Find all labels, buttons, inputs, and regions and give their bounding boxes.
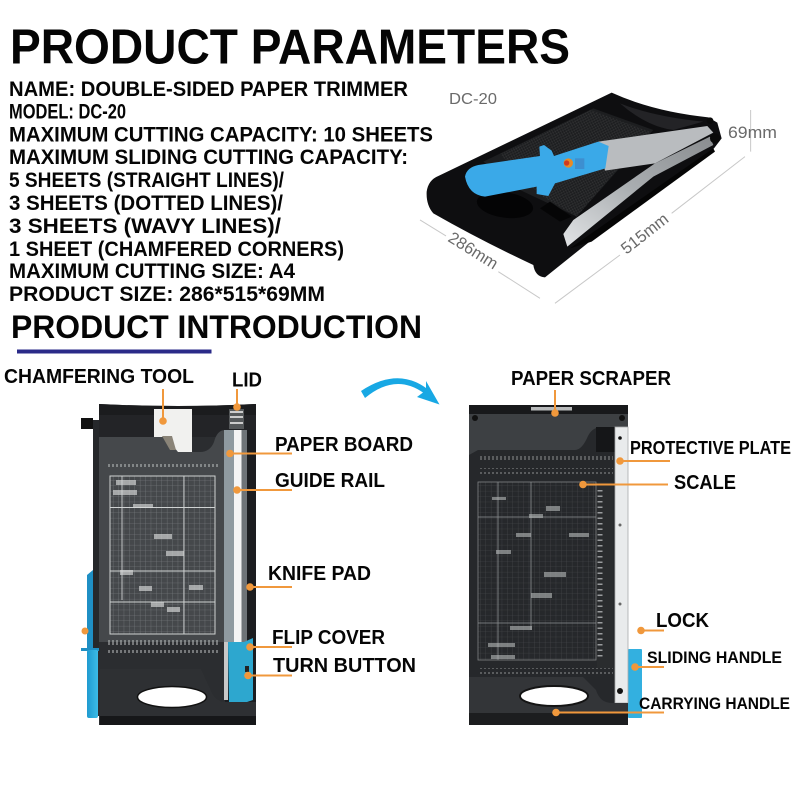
label: scale: SCALE bbox=[674, 472, 736, 494]
heading underline bbox=[17, 350, 212, 354]
text block: specifications: MODEL: DC-20 bbox=[9, 100, 126, 124]
dimension 515mm: 515mm bbox=[618, 210, 672, 258]
blue sliding handle bbox=[628, 649, 642, 718]
chamfering tool window bbox=[154, 409, 192, 452]
ruler top bbox=[106, 461, 218, 467]
body bbox=[98, 404, 256, 725]
dimension 69mm: 69mm bbox=[728, 124, 777, 142]
label: chamfering tool: CHAMFERING TOOL bbox=[4, 366, 194, 388]
label: paper scraper: PAPER SCRAPER bbox=[511, 368, 672, 390]
bottom section bbox=[100, 669, 256, 716]
label: knife pad: KNIFE PAD bbox=[268, 563, 371, 585]
blue handle bbox=[465, 142, 609, 197]
label: guide rail: GUIDE RAIL bbox=[275, 470, 385, 492]
panel: front view of trimmer bbox=[81, 404, 256, 725]
label: flip cover: FLIP COVER bbox=[272, 627, 386, 649]
text block: specifications: MAXIMUM CUTTING SIZE: A4 bbox=[9, 260, 295, 283]
label: paper board: PAPER BOARD bbox=[275, 434, 413, 456]
label: sliding handle: SLIDING HANDLE bbox=[647, 648, 782, 667]
text block: specifications: 1 SHEET (CHAMFERED CORNERS) bbox=[9, 238, 344, 261]
callouts: orange leader lines bbox=[82, 389, 670, 716]
dimension 286mm: 286mm bbox=[445, 229, 501, 273]
label: lid: LID bbox=[232, 370, 262, 392]
rulers bbox=[479, 454, 613, 460]
text block: specifications: 3 SHEETS (WAVY LINES)/ bbox=[9, 215, 281, 238]
carrying handle oval bbox=[520, 686, 588, 706]
label: turn button: TURN BUTTON bbox=[273, 655, 416, 677]
panel: back view of trimmer bbox=[469, 405, 642, 725]
label: carrying handle: CARRYING HANDLE bbox=[639, 694, 790, 713]
title: product parameters: PRODUCT PARAMETERS bbox=[10, 20, 570, 74]
text block: specifications: PRODUCT SIZE: 286*515*69MM bbox=[9, 283, 325, 306]
text block: specifications: NAME: DOUBLE-SIDED PAPER TRIMMER bbox=[9, 78, 408, 101]
carrying handle oval bbox=[138, 686, 206, 708]
text block: specifications: MAXIMUM CUTTING CAPACITY: 10 SHEETS bbox=[9, 124, 433, 146]
bottom section bbox=[469, 677, 628, 725]
lid latch bbox=[229, 409, 244, 429]
heading: product introduction: PRODUCT INTRODUCTION bbox=[11, 309, 422, 345]
body bbox=[469, 405, 628, 725]
cutting grid bbox=[110, 476, 215, 634]
protective plate bbox=[615, 427, 628, 703]
blue slide handle bbox=[87, 570, 93, 650]
illustration: paper trimmer with dimensions bbox=[420, 91, 777, 303]
text block: specifications: 3 SHEETS (DOTTED LINES)/ bbox=[9, 192, 283, 215]
flip cover bbox=[228, 638, 253, 702]
text block: specifications bbox=[9, 78, 433, 306]
model label: DC-20 bbox=[449, 91, 497, 108]
trimmer body bbox=[427, 93, 722, 277]
guide rail bbox=[224, 430, 235, 642]
dimension lines bbox=[420, 110, 751, 303]
cutting grid bbox=[478, 482, 596, 660]
side knob bbox=[81, 418, 93, 429]
text block: specifications: 5 SHEETS (STRAIGHT LINES)/ bbox=[9, 169, 284, 192]
text block: specifications: MAXIMUM SLIDING CUTTING CAPACITY: bbox=[9, 146, 408, 169]
label: lock: LOCK bbox=[656, 610, 710, 632]
lower rulers bbox=[107, 639, 219, 645]
arrow: flip to back view bbox=[361, 378, 440, 404]
